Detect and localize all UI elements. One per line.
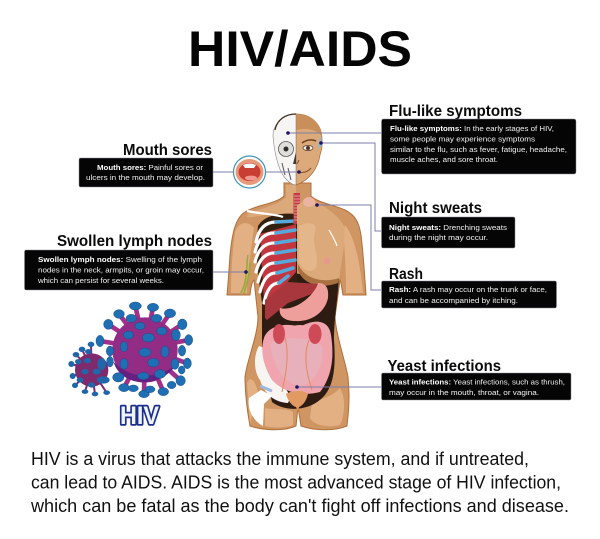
panel: swollen lymph nodes: Swollen lymph nodes (57, 233, 212, 250)
description text: which can be fatal as the body can't fight off infections and disease. (30, 495, 569, 516)
small intestine (270, 338, 323, 386)
skull pupil (284, 146, 288, 152)
eye (303, 145, 313, 151)
hip cartilage (260, 386, 272, 391)
panel: rash: Rash: A rash may occur on the trunk or face, (389, 285, 547, 294)
title: HIV/AIDS (188, 21, 412, 77)
panel: swollen lymph nodes: nodes in the neck, armpits, or groin may occur, (38, 266, 204, 274)
connector lines (213, 131, 381, 389)
large virus (96, 302, 193, 398)
panel: night sweats: during the night may occur. (389, 233, 488, 242)
panel: flu-like symptoms: some people may experience symptoms (390, 134, 535, 144)
description text: HIV is a virus that attacks the immune system, and if untreated, (31, 448, 529, 469)
panel: flu-like symptoms: Flu-like symptoms (389, 103, 522, 120)
description text: can lead to AIDS. AIDS is the most advanced stage of HIV infection, (31, 472, 561, 492)
bladder (286, 391, 308, 411)
arm and thigh highlights (231, 223, 363, 427)
panel: mouth sores: Mouth sores (123, 142, 212, 159)
skull eye socket (278, 142, 294, 156)
panel: flu-like symptoms (382, 103, 576, 174)
panel: yeast infections: Yeast infections: Yeast infections, such as thrush, (389, 378, 565, 386)
nipple (324, 258, 330, 264)
panel: night sweats: Night sweats: Drenching sweats (389, 223, 507, 232)
neck and shoulder skin (247, 185, 296, 217)
hairline top of skull (275, 114, 296, 130)
panel: night sweats (382, 200, 515, 248)
clavicle (247, 211, 283, 217)
panel: mouth sores (79, 142, 213, 187)
panel: rash: and can be accompanied by itching. (389, 296, 518, 305)
panel: flu-like symptoms: Flu-like symptoms: In the early stages of HIV, (390, 124, 554, 133)
right chest skin (297, 198, 345, 282)
body cavity (262, 270, 339, 409)
iris (306, 146, 310, 150)
body silhouette (227, 183, 366, 430)
connection between kidneys (286, 326, 309, 331)
panel: flu-like symptoms: muscle aches, and sore throat. (390, 155, 498, 164)
liver (265, 282, 320, 320)
trachea (294, 193, 300, 224)
large intestine (262, 322, 332, 394)
human body anatomy figure (227, 114, 366, 430)
kidneys (273, 324, 322, 344)
pelvis bone (255, 346, 289, 403)
left half of head: skull (273, 114, 296, 185)
ribs (255, 221, 295, 303)
skull teeth (282, 163, 291, 180)
eyebrow (302, 140, 316, 143)
right half of head (296, 114, 322, 185)
rash patch (303, 197, 315, 207)
panel: rash (382, 266, 556, 308)
panel: flu-like symptoms: similar to the flu, such as fever, fatigue, headache, (390, 145, 567, 154)
icon: HIV lettering: HIV (120, 402, 159, 430)
stomach (280, 283, 328, 321)
panel: swollen lymph nodes: Swollen lymph nodes: Swelling of the lymph (38, 255, 202, 264)
scalp shading (296, 114, 322, 136)
panel: mouth sores: Mouth sores: Painful sores or (97, 163, 203, 172)
temple sweat (318, 135, 322, 149)
skull nose (293, 152, 296, 164)
chest light patch (299, 223, 317, 271)
description text (30, 448, 569, 516)
panel: yeast infections: may occur in the mouth, throat, or vagina. (389, 388, 539, 397)
panel: swollen lymph nodes: which can persist for several weeks. (37, 276, 164, 285)
chest cavity top (257, 214, 297, 318)
nose and mouth (297, 160, 311, 172)
icon: open mouth (234, 156, 266, 188)
lower chest shading (298, 264, 339, 286)
trachea rings (294, 196, 300, 220)
lymph nodes (241, 255, 250, 294)
lungs (260, 224, 296, 302)
panel: yeast infections: Yeast infections (388, 358, 501, 375)
spike caps (96, 302, 193, 398)
panel: swollen lymph nodes (24, 233, 213, 290)
icon: HIV virus (68, 302, 193, 398)
pectoral line (329, 230, 337, 246)
ureters (282, 338, 312, 392)
femur (249, 390, 272, 426)
panel: rash: Rash (389, 266, 423, 283)
panel: yeast infections (382, 358, 571, 400)
panel: night sweats: Night sweats (389, 200, 482, 217)
small virus (68, 342, 110, 396)
panel: mouth sores: ulcers in the mouth may develop. (86, 173, 205, 182)
